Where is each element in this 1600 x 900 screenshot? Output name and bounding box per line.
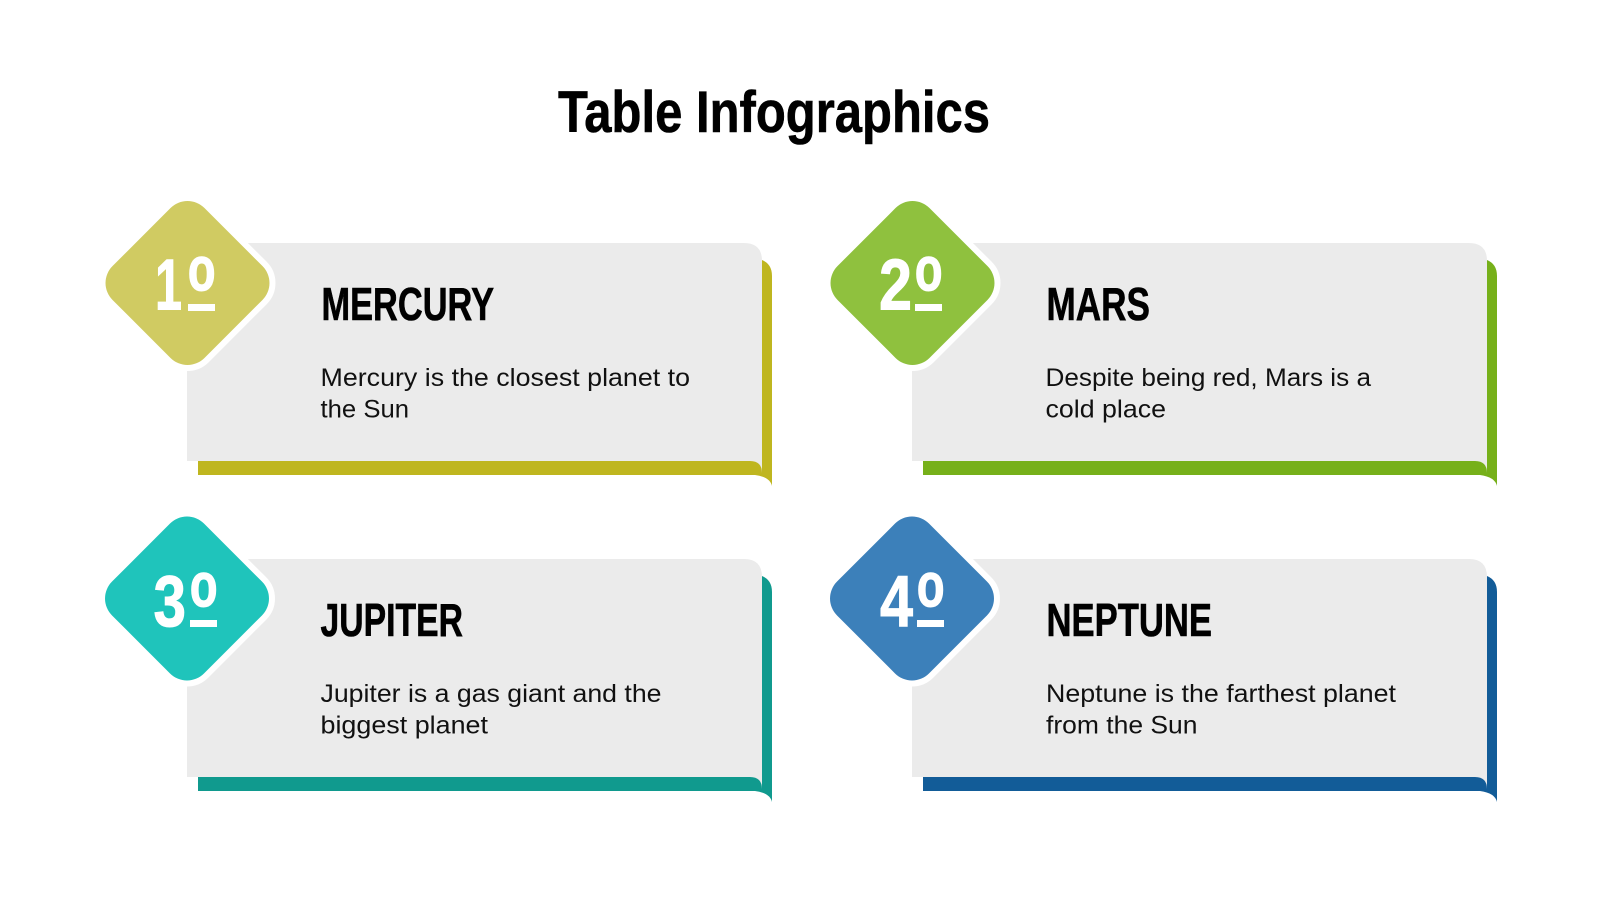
panel: neptune <box>820 507 1497 802</box>
card: neptune <box>912 559 1487 789</box>
number: fourth: º <box>916 552 944 668</box>
description: mercury: the Sun <box>320 396 409 424</box>
card: jupiter <box>187 559 762 789</box>
number: second <box>879 236 942 352</box>
number: fourth: 4 <box>880 562 913 642</box>
panel: mars <box>821 191 1497 486</box>
number: third <box>154 552 218 668</box>
description: jupiter: Jupiter is a gas giant and the <box>320 680 662 708</box>
description: mars: Despite being red, Mars is a <box>1046 364 1371 392</box>
heading: mercury: MERCURY <box>322 278 494 330</box>
description: neptune <box>1046 680 1396 740</box>
card: mercury <box>187 243 762 473</box>
number: second: 2 <box>879 246 912 326</box>
description: jupiter: biggest planet <box>320 712 488 740</box>
accent strip: jupiter <box>198 576 772 802</box>
icon: neptune diamond <box>820 507 1004 690</box>
heading: mars: MARS <box>1046 278 1150 330</box>
icon: mars diamond <box>821 191 1004 375</box>
title: Table Infographics <box>558 80 990 145</box>
panel: jupiter <box>95 507 772 802</box>
number: first: 1 <box>155 246 182 326</box>
description: mars <box>1046 364 1371 424</box>
heading: neptune: NEPTUNE <box>1046 594 1212 646</box>
description: mercury: Mercury is the closest planet to <box>320 364 690 392</box>
card: mars <box>912 243 1487 473</box>
description: jupiter <box>320 680 662 740</box>
description: mercury <box>320 364 690 424</box>
panel: mercury <box>96 191 772 486</box>
description: neptune: from the Sun <box>1046 712 1198 740</box>
number: first: º <box>188 236 216 352</box>
number: first <box>155 236 216 352</box>
heading: jupiter: JUPITER <box>320 594 463 646</box>
number: fourth <box>880 552 944 668</box>
number: third: º <box>190 552 218 668</box>
accent strip: neptune <box>923 576 1497 802</box>
icon: mercury diamond <box>96 191 279 375</box>
description: neptune: Neptune is the farthest planet <box>1046 680 1396 708</box>
number: third: 3 <box>154 562 186 642</box>
accent strip: mars <box>923 260 1497 486</box>
description: mars: cold place <box>1046 396 1166 424</box>
icon: jupiter diamond <box>95 507 279 690</box>
accent strip: mercury <box>198 260 772 486</box>
number: second: º <box>914 236 942 352</box>
